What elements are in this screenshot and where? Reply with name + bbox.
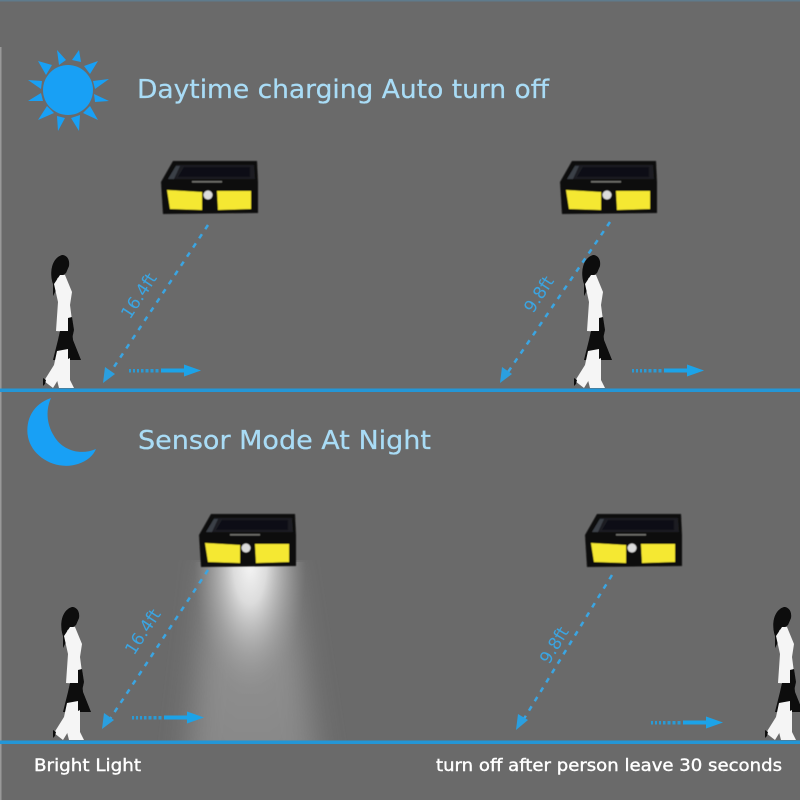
day distance left	[103, 225, 208, 383]
day distance right	[500, 222, 610, 383]
woman: night right	[765, 607, 800, 740]
icon: sun	[28, 50, 109, 131]
icon: moon	[27, 398, 96, 466]
day distance left: 16.4ft	[117, 269, 162, 323]
woman: day right	[574, 255, 612, 388]
night lamp left	[199, 514, 296, 567]
woman: day left	[43, 255, 81, 388]
arrow: day left	[129, 364, 201, 376]
day lamp left	[161, 161, 258, 214]
arrow: day right	[632, 364, 704, 376]
woman: night left	[53, 607, 91, 740]
night lamp right	[585, 514, 682, 567]
ground line: night	[0, 740, 800, 744]
night distance left	[102, 570, 208, 729]
night distance right	[516, 575, 612, 730]
ground line: day	[0, 388, 800, 392]
night distance right: 9.8ft	[536, 623, 574, 668]
heading: daytime: Daytime charging Auto turn off	[137, 75, 550, 105]
heading: night: Sensor Mode At Night	[138, 426, 431, 456]
light beam	[180, 560, 324, 740]
day lamp right	[560, 161, 657, 214]
caption: bright light: Bright Light	[34, 756, 141, 776]
arrow: night left	[132, 712, 204, 724]
night distance left: 16.4ft	[121, 605, 166, 659]
arrow: night right	[651, 716, 723, 728]
caption: turn off: turn off after person leave 30 seconds	[436, 756, 782, 776]
day distance right: 9.8ft	[520, 273, 559, 317]
